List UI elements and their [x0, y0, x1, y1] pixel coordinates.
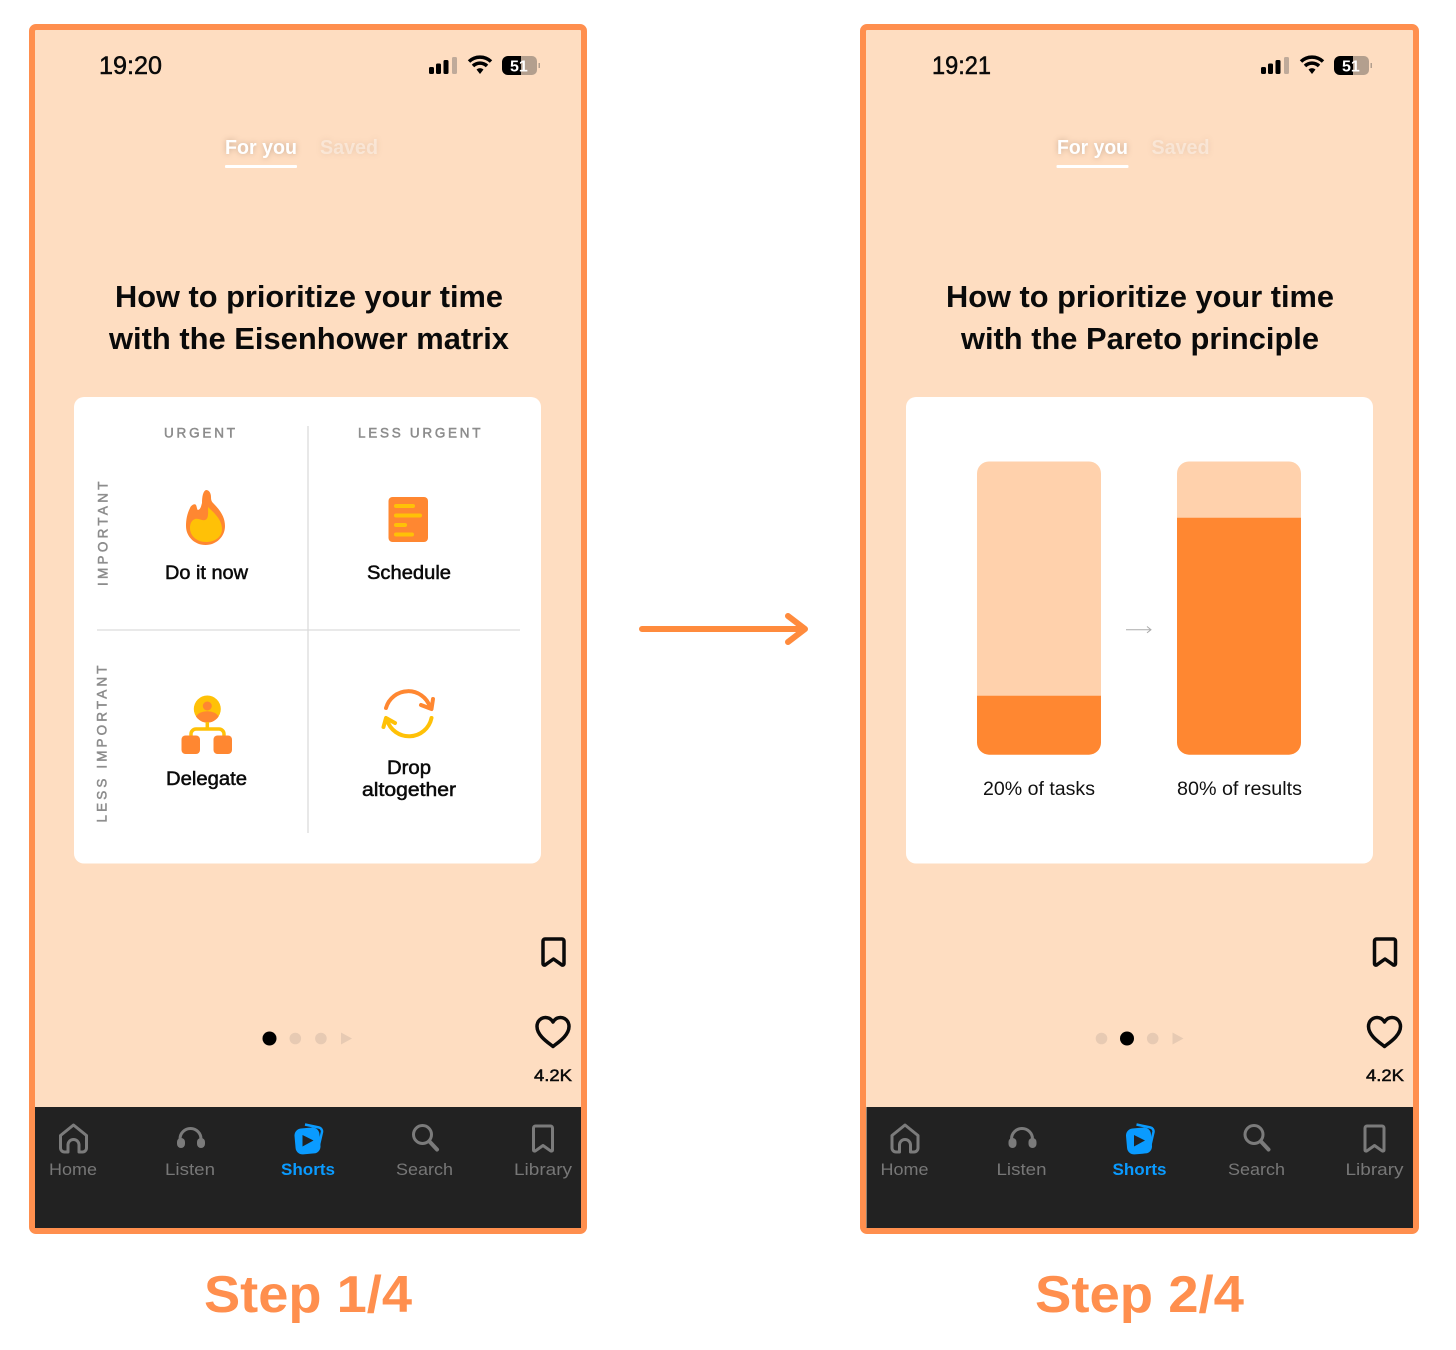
like count: 4.2K: [534, 1066, 573, 1085]
tabs: [1056, 137, 1210, 168]
icon: bookmark: [1374, 939, 1396, 965]
nav labels: Home: [49, 1160, 97, 1179]
cell: schedule: [367, 497, 451, 584]
status bar time: 19:20: [99, 52, 162, 80]
nav labels: [880, 1160, 1404, 1179]
nav labels: Library: [514, 1160, 573, 1179]
column and row headers: IMPORTANT: [96, 482, 110, 586]
bar: 80% of results: 80% of results: [1177, 779, 1302, 800]
title: with the Pareto principle: [960, 321, 1319, 356]
nav labels: Shorts: [281, 1160, 335, 1179]
icon: heart: [1368, 1018, 1400, 1046]
cell: delegate: [166, 696, 247, 790]
tabs: For you: [1057, 137, 1128, 159]
nav labels: Home: [880, 1160, 928, 1179]
carousel dots: [262, 1032, 352, 1046]
tabs: [225, 137, 378, 168]
step label 2: Step 2/4: [1035, 1266, 1244, 1324]
icon: shorts: [1125, 1124, 1154, 1155]
panel: Eisenhower matrix card: [74, 397, 541, 864]
cell: delegate: Delegate: [166, 769, 247, 790]
icon: library bookmark: [1365, 1126, 1384, 1151]
phone frame and background: [863, 27, 1416, 1231]
step label 1: Step 1/4: [204, 1266, 412, 1324]
icon: headphones: [177, 1128, 205, 1148]
bar: 20% of tasks: 20% of tasks: [983, 779, 1095, 800]
icon: headphones: [1008, 1128, 1036, 1148]
icon: library bookmark: [534, 1126, 552, 1151]
column and row headers: LESS URGENT: [358, 426, 480, 440]
title: How to prioritize your time: [115, 279, 503, 314]
like count: 4.2K: [1366, 1066, 1405, 1085]
column and row headers: LESS IMPORTANT: [94, 666, 110, 822]
icon: bookmark: [543, 939, 564, 965]
icon: shorts: [294, 1124, 322, 1155]
column and row headers: [94, 426, 480, 822]
panel: Pareto chart card: [906, 397, 1373, 864]
nav labels: Shorts: [1112, 1160, 1166, 1179]
column and row headers: URGENT: [164, 426, 235, 440]
cell: drop altogether: altogether: [362, 780, 457, 801]
small arrow: [1126, 626, 1151, 633]
status bar time: 19:21: [932, 52, 991, 80]
status bar icons: [1261, 56, 1372, 76]
cell: do it now: Do it now: [165, 563, 248, 584]
phone screen: step 1 Eisenhower matrix: [32, 27, 584, 1231]
bottom navigation bar: [35, 1107, 581, 1228]
phone frame and background: [32, 27, 584, 1231]
cell: schedule: Schedule: [367, 563, 451, 584]
status bar icons: [429, 56, 540, 76]
tabs: Saved: [320, 137, 378, 159]
title: with the Eisenhower matrix: [108, 321, 510, 356]
nav labels: Library: [1346, 1160, 1404, 1179]
status bar icons: 51: [1342, 58, 1360, 76]
arrow between steps: [642, 616, 805, 642]
nav labels: [49, 1160, 573, 1179]
status bar icons: 51: [510, 58, 528, 76]
nav labels: Listen: [996, 1160, 1046, 1179]
tabs: For you: [225, 137, 297, 159]
icon: search: [1245, 1126, 1268, 1150]
title: How to prioritize your time: [946, 279, 1334, 314]
tabs: Saved: [1152, 137, 1210, 159]
nav labels: Search: [1228, 1160, 1285, 1179]
icon: heart: [537, 1018, 569, 1046]
cell: drop altogether: [362, 691, 457, 801]
nav labels: Listen: [165, 1160, 215, 1179]
bottom navigation bar: [866, 1107, 1413, 1228]
icon: home: [892, 1125, 918, 1152]
icon: search: [414, 1126, 437, 1150]
title: [108, 279, 510, 356]
icon: home: [60, 1125, 86, 1152]
title: [946, 279, 1334, 356]
phone screen: step 2 Pareto principle: [863, 27, 1416, 1231]
bar: 80% of results: [1177, 462, 1302, 800]
nav labels: Search: [396, 1160, 453, 1179]
carousel dots: [1096, 1032, 1184, 1046]
bar: 20% of tasks: [977, 462, 1101, 800]
cell: drop altogether: Drop: [387, 758, 431, 779]
cell: do it now: [165, 490, 248, 584]
